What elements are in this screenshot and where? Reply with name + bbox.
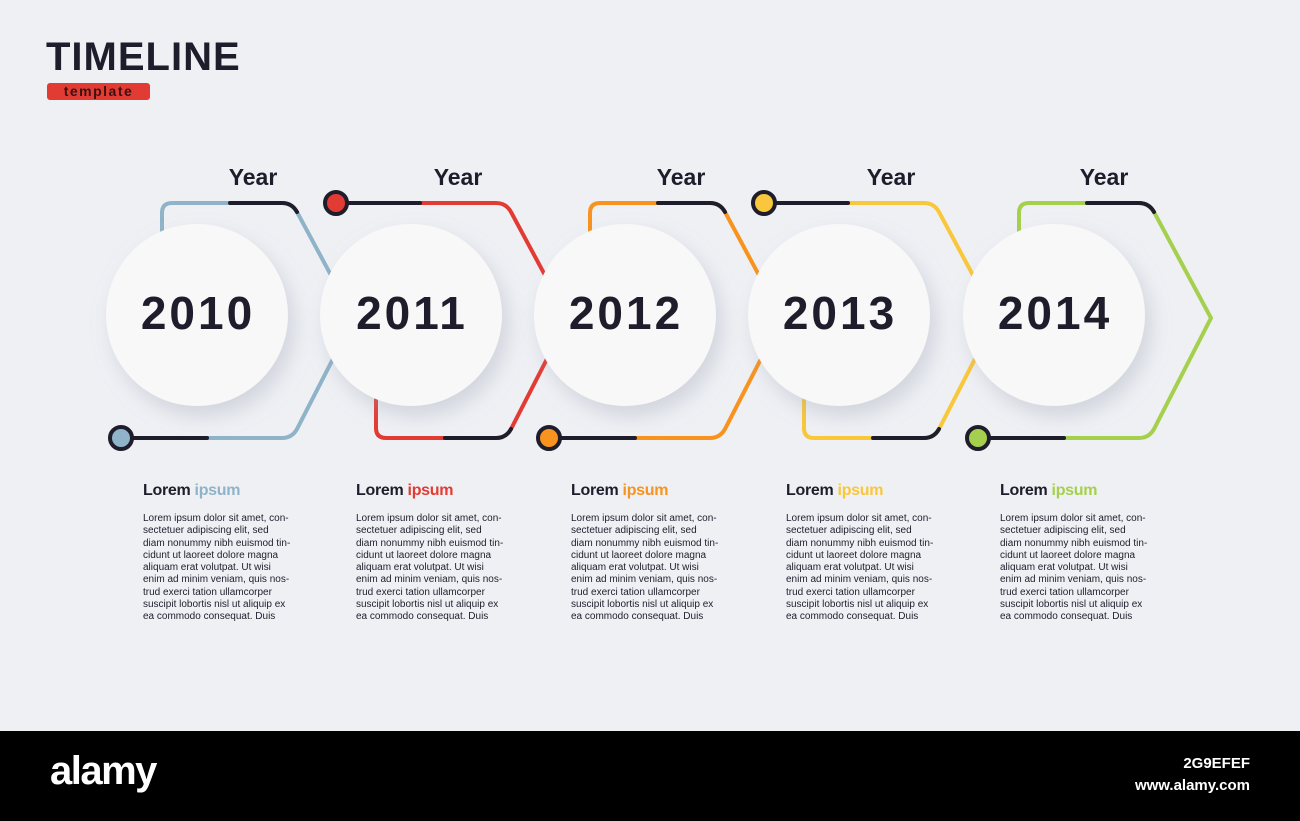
text block 1: Lorem ipsum (143, 482, 240, 499)
text block 4 (786, 482, 933, 622)
text block 3: ea commodo consequat. Duis (571, 611, 703, 622)
text block 1: cidunt ut laoreet dolore magna (143, 550, 278, 561)
text block 3: trud exerci tation ullamcorper (571, 587, 700, 598)
text block 3: suscipit lobortis nisl ut aliquip ex (571, 599, 713, 610)
text block 5: Lorem ipsum (1000, 482, 1097, 499)
text block 5: enim ad minim veniam, quis nos- (1000, 574, 1146, 585)
text block 2: Lorem ipsum (356, 482, 453, 499)
text block 5: ea commodo consequat. Duis (1000, 611, 1132, 622)
text block 5: aliquam erat volutpat. Ut wisi (1000, 562, 1128, 573)
text block 3: sectetuer adipiscing elit, sed (571, 525, 697, 536)
year numbers (141, 287, 1112, 339)
text block 2: ea commodo consequat. Duis (356, 611, 488, 622)
line: 2011 red (336, 203, 568, 438)
text block 3: aliquam erat volutpat. Ut wisi (571, 562, 699, 573)
text block 2 (356, 482, 503, 622)
footer id: www.alamy.com (1135, 777, 1250, 794)
text block 3: cidunt ut laoreet dolore magna (571, 550, 706, 561)
year numbers: 2011 (356, 287, 468, 339)
line: 2012 orange (549, 203, 782, 438)
footer id: 2G9EFEF (1183, 755, 1250, 772)
text block 1 (143, 482, 290, 622)
line: 2013 yellow (764, 203, 996, 438)
year circles (106, 224, 1145, 406)
text block 4: cidunt ut laoreet dolore magna (786, 550, 921, 561)
text block 3: Lorem ipsum dolor sit amet, con- (571, 513, 717, 524)
year labels: Year (657, 164, 705, 190)
text block 5: diam nonummy nibh euismod tin- (1000, 538, 1147, 549)
text block 2: Lorem ipsum dolor sit amet, con- (356, 513, 502, 524)
text block 2: cidunt ut laoreet dolore magna (356, 550, 491, 561)
text block 2: aliquam erat volutpat. Ut wisi (356, 562, 484, 573)
subtitle pill (47, 83, 150, 100)
text block 5: sectetuer adipiscing elit, sed (1000, 525, 1126, 536)
year labels: Year (229, 164, 277, 190)
text block 5: Lorem ipsum dolor sit amet, con- (1000, 513, 1146, 524)
text block 2: enim ad minim veniam, quis nos- (356, 574, 502, 585)
text block 5 (1000, 482, 1147, 622)
text block 4: diam nonummy nibh euismod tin- (786, 538, 933, 549)
text block 5: cidunt ut laoreet dolore magna (1000, 550, 1135, 561)
text block 2: trud exerci tation ullamcorper (356, 587, 485, 598)
footer logo: alamy (50, 749, 156, 793)
text block 1: trud exerci tation ullamcorper (143, 587, 272, 598)
text block 1: enim ad minim veniam, quis nos- (143, 574, 289, 585)
text block 4: ea commodo consequat. Duis (786, 611, 918, 622)
text block 5: trud exerci tation ullamcorper (1000, 587, 1129, 598)
text block 1: suscipit lobortis nisl ut aliquip ex (143, 599, 285, 610)
text block 1: ea commodo consequat. Duis (143, 611, 275, 622)
text block 4: Lorem ipsum dolor sit amet, con- (786, 513, 932, 524)
text block 5: suscipit lobortis nisl ut aliquip ex (1000, 599, 1142, 610)
text block 2: suscipit lobortis nisl ut aliquip ex (356, 599, 498, 610)
text block 1: sectetuer adipiscing elit, sed (143, 525, 269, 536)
text block 4: aliquam erat volutpat. Ut wisi (786, 562, 914, 573)
text block 4: sectetuer adipiscing elit, sed (786, 525, 912, 536)
text block 1: Lorem ipsum dolor sit amet, con- (143, 513, 289, 524)
line: 2014 green (978, 203, 1211, 438)
text block 4: suscipit lobortis nisl ut aliquip ex (786, 599, 928, 610)
text block 4: trud exerci tation ullamcorper (786, 587, 915, 598)
footer id (1135, 755, 1250, 794)
year numbers: 2010 (141, 287, 255, 339)
year labels: Year (1080, 164, 1128, 190)
text block 4: enim ad minim veniam, quis nos- (786, 574, 932, 585)
year numbers: 2014 (998, 287, 1112, 339)
line: 2010 blue (121, 203, 354, 438)
text block 1: aliquam erat volutpat. Ut wisi (143, 562, 271, 573)
text block 3: Lorem ipsum (571, 482, 668, 499)
text block 4: Lorem ipsum (786, 482, 883, 499)
text block 3: enim ad minim veniam, quis nos- (571, 574, 717, 585)
text block 1: diam nonummy nibh euismod tin- (143, 538, 290, 549)
text block 3: diam nonummy nibh euismod tin- (571, 538, 718, 549)
year labels (229, 164, 1128, 190)
text block 3 (571, 482, 718, 622)
title: TIMELINE (46, 35, 241, 79)
footer bar (0, 731, 1300, 821)
dots (110, 192, 989, 449)
year numbers: 2012 (569, 287, 683, 339)
text block 2: diam nonummy nibh euismod tin- (356, 538, 503, 549)
subtitle pill: template (64, 83, 133, 99)
year labels: Year (434, 164, 482, 190)
year labels: Year (867, 164, 915, 190)
text block 2: sectetuer adipiscing elit, sed (356, 525, 482, 536)
year numbers: 2013 (783, 287, 897, 339)
